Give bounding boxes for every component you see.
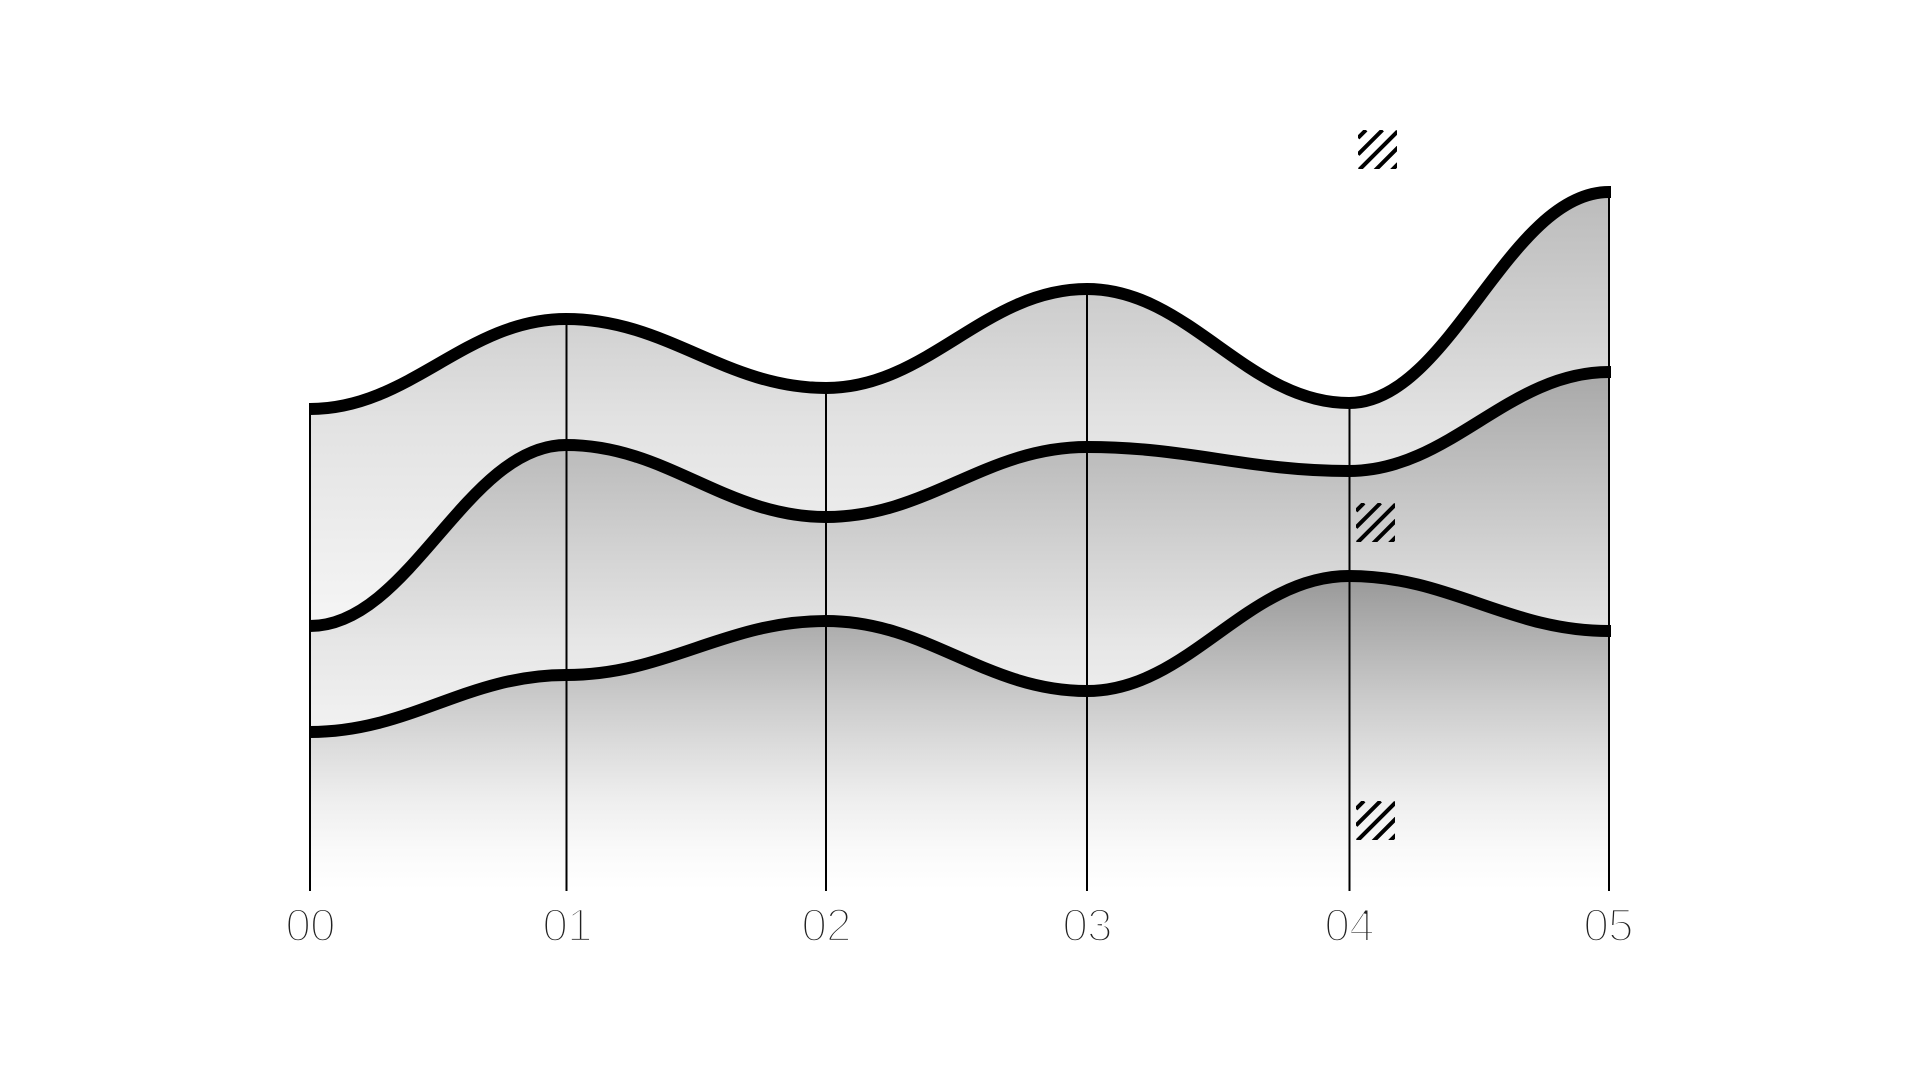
axis labels: 05 (1583, 899, 1633, 951)
axis labels: 02 (801, 899, 851, 951)
curve: top series (309, 192, 1611, 409)
layered area chart (288, 130, 1630, 940)
axis labels: 00 (285, 899, 335, 951)
icon: hatch marker top (1358, 130, 1397, 169)
band: top area (310, 192, 1609, 890)
icon: hatch marker bottom (1356, 801, 1395, 840)
band: bottom area (310, 576, 1609, 890)
axis labels (285, 899, 1633, 951)
curve: bottom series (309, 576, 1611, 732)
band: middle area (310, 372, 1609, 890)
icon: hatch marker middle (1356, 503, 1395, 542)
axis labels: 04 (1324, 899, 1374, 951)
axis labels: 01 (542, 899, 592, 951)
axis labels: 03 (1062, 899, 1112, 951)
curve: middle series (309, 372, 1611, 626)
vertical axis lines (310, 192, 1609, 891)
